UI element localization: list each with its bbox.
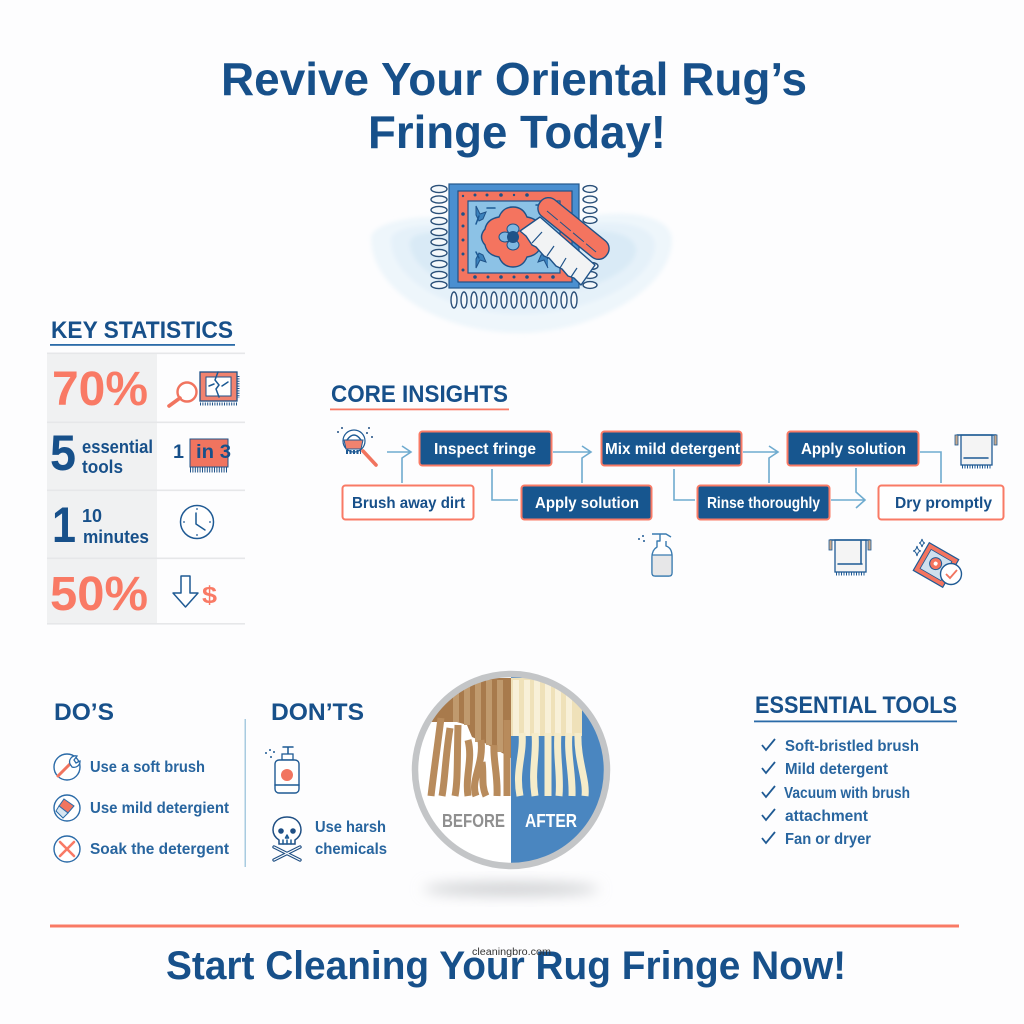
- watermark: cleaningbro.com: [472, 947, 551, 958]
- icon: towel top: [955, 435, 997, 467]
- stat: 5 essential tools: essential: [82, 437, 153, 457]
- icon: magnifier on rug: [169, 372, 238, 406]
- heading: DO’S: [54, 699, 114, 726]
- icon: clock: [180, 506, 214, 538]
- step: brush away dirt: [342, 486, 474, 520]
- step: mix mild detergent: [602, 432, 742, 466]
- panel: don'ts: [265, 699, 387, 860]
- step: inspect fringe: Inspect fringe: [434, 441, 536, 458]
- checklist: [762, 738, 919, 848]
- before fringe: [430, 678, 511, 796]
- label: before: BEFORE: [442, 811, 505, 831]
- item: soak the detergent: Soak the detergent: [90, 841, 230, 858]
- icon: clean rug with check: [913, 539, 962, 587]
- title: [221, 53, 807, 158]
- stat: 70%: [52, 363, 238, 416]
- brush: [520, 194, 613, 285]
- icon: down arrow and dollar: $: [202, 582, 218, 609]
- stat: 50%: 50%: [50, 568, 148, 621]
- stat: 10 minutes: minutes: [83, 527, 149, 547]
- icon: magnifier with basket: [337, 427, 376, 465]
- text: use harsh chemicals: [315, 819, 387, 858]
- step: dry promptly: Dry promptly: [895, 495, 992, 512]
- checklist: Fan or dryer: [785, 831, 871, 848]
- hero illustration: rug and brush: [371, 184, 672, 333]
- step: dry promptly: [878, 486, 1004, 520]
- item: use mild detergent: [54, 795, 230, 821]
- heading: CORE INSIGHTS: [331, 381, 508, 408]
- after fringe: [511, 678, 585, 796]
- step: rinse thoroughly: [698, 486, 830, 520]
- panel: core insights: [330, 381, 1004, 587]
- heading: ESSENTIAL TOOLS: [755, 692, 957, 719]
- call to action: Start Cleaning Your Rug Fringe Now!: [166, 944, 846, 988]
- label: after: AFTER: [525, 811, 577, 831]
- step: apply solution: Apply solution: [535, 495, 639, 512]
- bottom fringe: [451, 292, 577, 308]
- stat: 10 minutes: 1: [52, 497, 76, 553]
- icon: 1 in 3: 1: [173, 442, 184, 463]
- item: use a soft brush: Use a soft brush: [90, 759, 205, 776]
- icon: towel bottom: [829, 540, 871, 574]
- step: mix mild detergent: Mix mild detergent: [605, 441, 741, 458]
- icon: 1 in 3: in 3: [196, 442, 231, 463]
- left fringe: [431, 185, 447, 289]
- checklist: Soft-bristled brush: [785, 738, 919, 755]
- step: inspect fringe: [420, 432, 552, 466]
- stat: 5 essential tools: tools: [82, 457, 123, 477]
- heading: DON’TS: [271, 699, 364, 726]
- shadow: [423, 883, 599, 895]
- stat: 50%: [50, 568, 218, 621]
- text: use harsh chemicals: Use harsh: [315, 819, 386, 836]
- stat: 5 essential tools: 5: [50, 425, 76, 481]
- rug body: [449, 184, 579, 288]
- step: rinse thoroughly: Rinse thoroughly: [707, 495, 820, 512]
- connectors: [387, 446, 941, 508]
- before and after circle: [411, 670, 611, 895]
- panel: key statistics: [47, 317, 245, 625]
- checklist: Vacuum with brush: [784, 785, 910, 802]
- icon: down arrow and dollar: [173, 576, 218, 609]
- right fringe: [583, 186, 598, 288]
- step: brush away dirt: Brush away dirt: [352, 495, 466, 512]
- icon: 1 in 3: [173, 439, 231, 470]
- icon: spray bottle: [638, 534, 672, 576]
- icon: pump bottle: [265, 747, 299, 793]
- item: soak the detergent: [54, 836, 230, 862]
- step: apply solution: [522, 486, 652, 520]
- text: use harsh chemicals: chemicals: [315, 841, 387, 858]
- stat: 5 essential tools: [50, 425, 231, 481]
- checklist: Mild detergent: [785, 761, 889, 778]
- divider: [244, 719, 246, 867]
- checklist: attachment: [785, 808, 869, 825]
- footer line: [50, 924, 959, 928]
- step: apply solution 2: [788, 432, 918, 466]
- title: Revive Your Oriental Rug’s: [221, 53, 807, 105]
- panel: do's: [54, 699, 230, 862]
- item: use mild detergent: Use mild detergient: [90, 800, 230, 817]
- stat: 10 minutes: 10: [82, 506, 102, 526]
- icon: skull and crossbones: [273, 817, 301, 860]
- panel: essential tools: [754, 692, 957, 848]
- item: use a soft brush: [54, 754, 205, 780]
- stat: 70%: 70%: [52, 363, 148, 416]
- stat: 10 minutes: [52, 497, 214, 553]
- ring: [415, 674, 607, 866]
- stats table: [47, 352, 245, 625]
- heading: KEY STATISTICS: [51, 317, 233, 344]
- title: Fringe Today!: [368, 106, 666, 158]
- halo: [371, 214, 672, 333]
- step: apply solution 2: Apply solution: [801, 441, 906, 458]
